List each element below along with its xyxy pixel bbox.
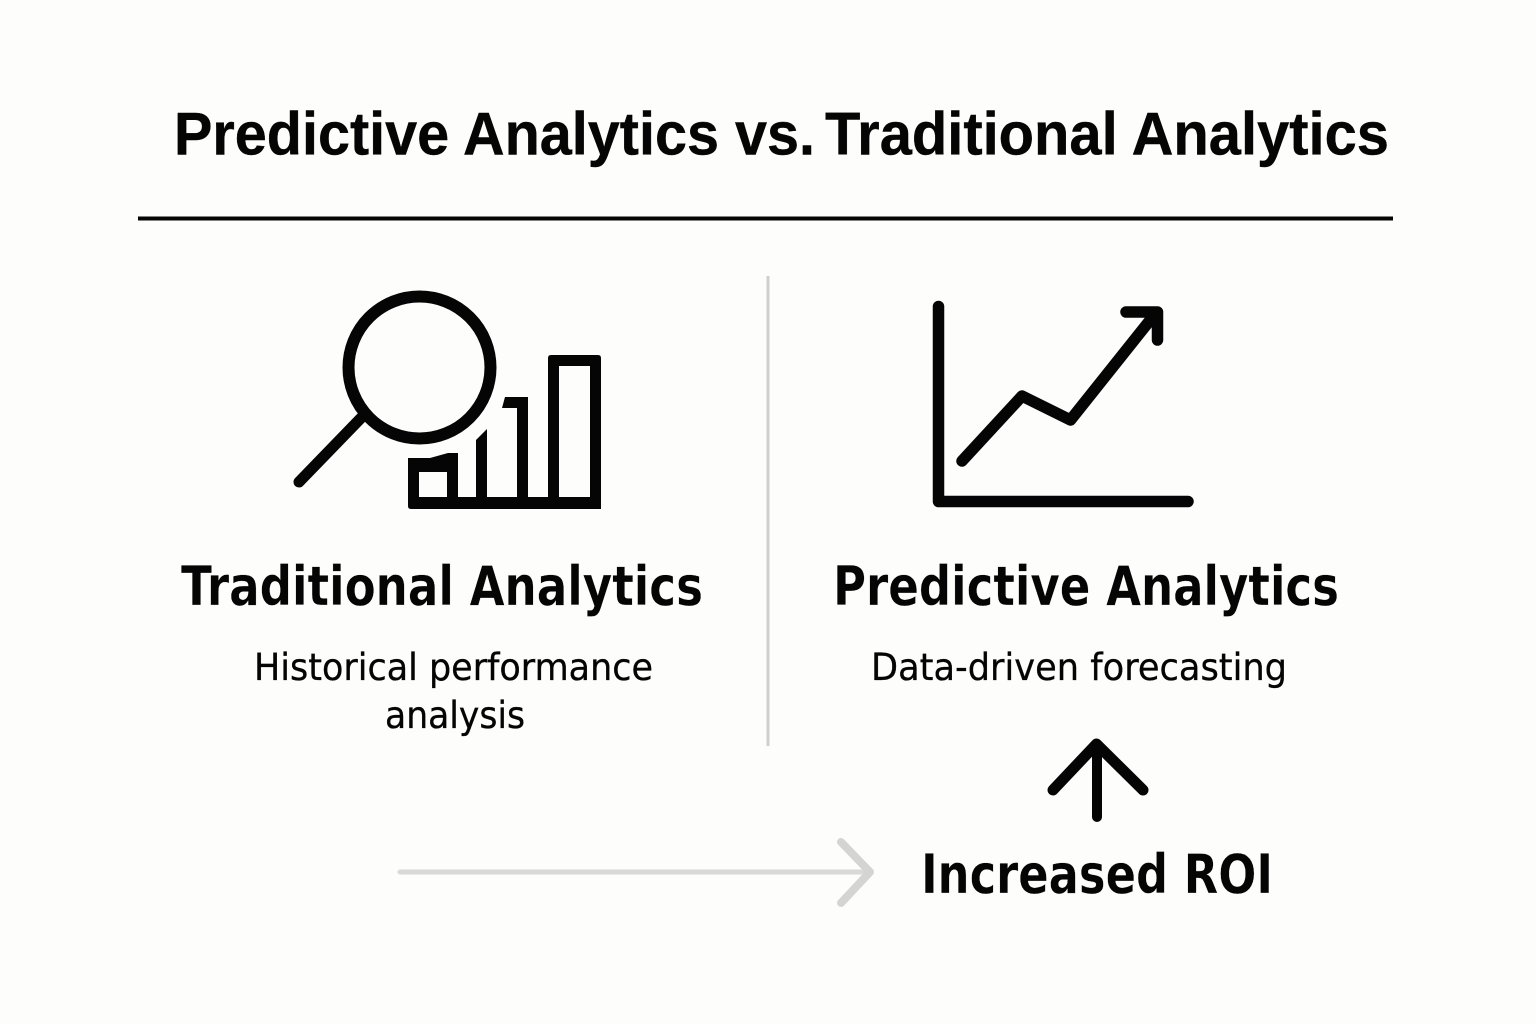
icon: line chart with rising arrow xyxy=(938,306,1188,502)
text: traditional description: Historical performance xyxy=(254,646,653,689)
text: predictive description: Data-driven forecasting xyxy=(871,646,1287,689)
text: traditional description: analysis xyxy=(385,694,525,737)
panel: traditional analytics xyxy=(181,296,703,737)
heading: predictive analytics: Predictive Analytics xyxy=(833,555,1339,618)
title: Predictive Analytics vs. xyxy=(174,100,815,168)
label: increased roi: Increased ROI xyxy=(921,843,1273,906)
text: traditional description xyxy=(254,646,653,737)
arrow: up xyxy=(1053,744,1143,817)
heading: traditional analytics: Traditional Analytics xyxy=(181,555,703,618)
title: Traditional Analytics xyxy=(825,100,1389,168)
panel: predictive analytics xyxy=(833,306,1339,689)
title xyxy=(174,100,1389,168)
icon: magnifier over bar chart xyxy=(299,296,601,509)
arrow: right xyxy=(400,842,870,903)
